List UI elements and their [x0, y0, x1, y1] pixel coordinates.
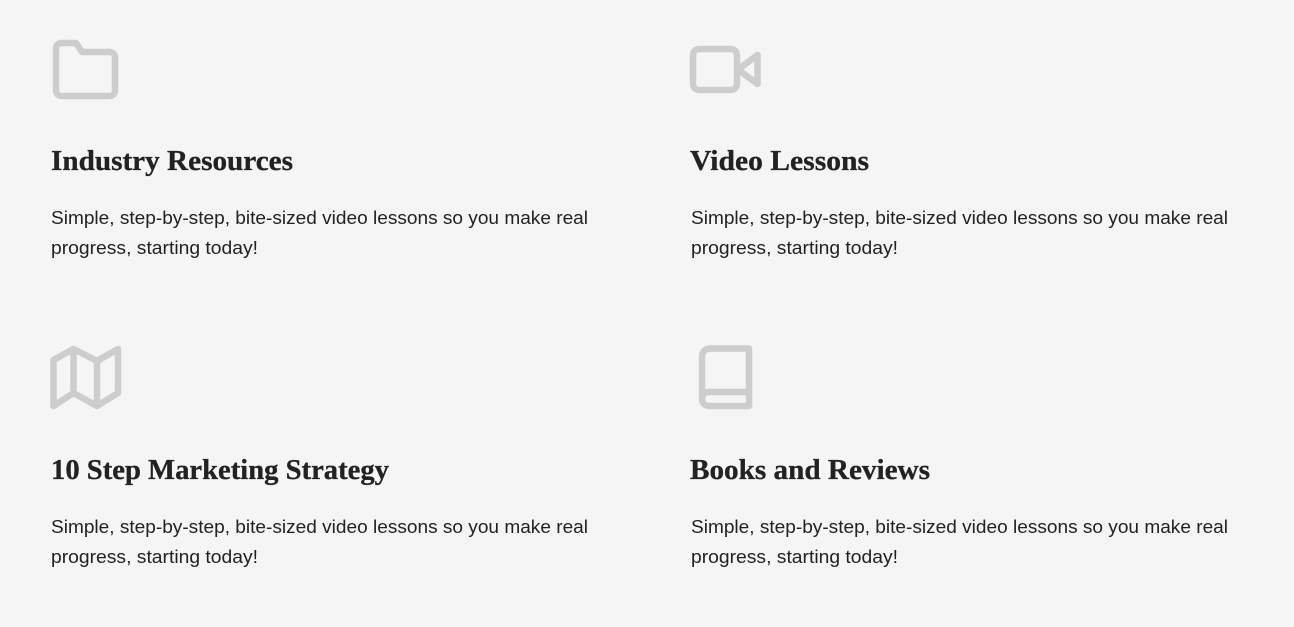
- text block: industry resources description: Simple, step-by-step, bite-sized video lessons so you make real: [51, 207, 588, 228]
- heading: books and reviews: Books and Reviews: [690, 454, 930, 486]
- text block: marketing strategy description: Simple, step-by-step, bite-sized video lessons so you make real: [51, 516, 588, 537]
- panel: books and reviews: [690, 348, 1228, 567]
- panel: video lessons: [690, 49, 1228, 258]
- text block: industry resources description: [51, 207, 588, 258]
- text block: industry resources description: progress, starting today!: [51, 237, 258, 258]
- text block: books and reviews description: Simple, step-by-step, bite-sized video lessons so you make real: [691, 516, 1228, 537]
- icon: video camera: [693, 49, 758, 90]
- text block: video lessons description: progress, starting today!: [691, 237, 898, 258]
- text block: books and reviews description: [691, 516, 1228, 567]
- heading: marketing strategy: 10 Step Marketing Strategy: [51, 454, 389, 486]
- panel: marketing strategy: [51, 349, 588, 567]
- text block: video lessons description: [691, 207, 1228, 258]
- text block: marketing strategy description: progress, starting today!: [51, 546, 258, 567]
- panel: industry resources: [51, 43, 588, 258]
- text block: books and reviews description: progress, starting today!: [691, 546, 898, 567]
- text block: video lessons description: Simple, step-by-step, bite-sized video lessons so you make real: [691, 207, 1228, 228]
- text block: marketing strategy description: [51, 516, 588, 567]
- heading: industry resources: Industry Resources: [51, 145, 293, 177]
- heading: video lessons: Video Lessons: [690, 145, 869, 177]
- icon: folded map: [54, 349, 118, 406]
- icon: book: [702, 348, 749, 406]
- icon: folder: [56, 43, 115, 96]
